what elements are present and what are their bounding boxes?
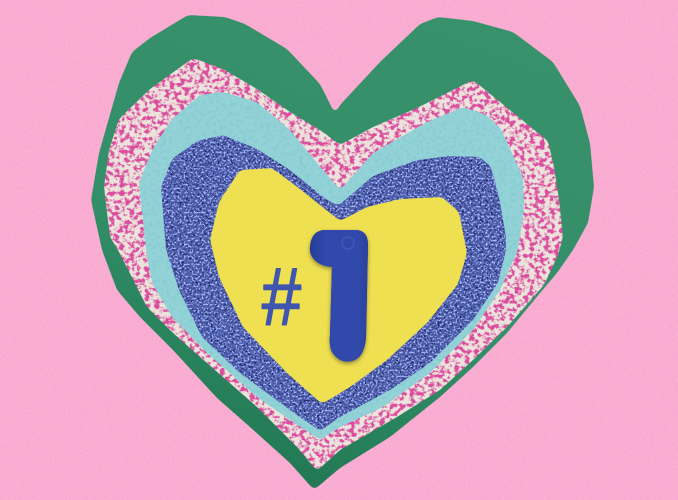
panel: yellow paper heart	[206, 164, 471, 408]
clay numeral one: 1	[286, 198, 386, 399]
hash symbol: #	[262, 252, 302, 343]
panel: crayon-textured white paper heart	[100, 55, 567, 475]
panel: teal felt heart	[135, 88, 528, 444]
panel: blue glitter heart	[157, 131, 510, 435]
panel: green paper heart	[88, 12, 598, 492]
clay numeral one	[307, 229, 371, 366]
